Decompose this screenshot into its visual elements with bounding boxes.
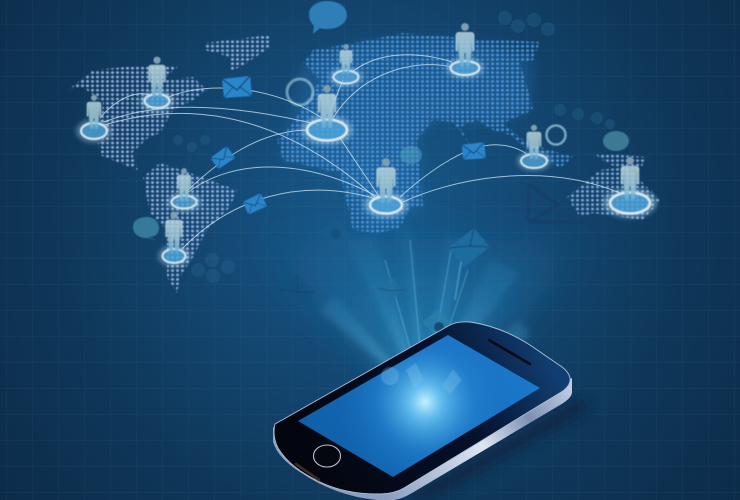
person: South East Asia <box>517 125 551 171</box>
phone shadow <box>400 398 590 500</box>
icon: envelope asia <box>462 142 486 160</box>
person: Europe <box>301 85 353 145</box>
network connection lines <box>100 55 620 248</box>
bottom slot <box>296 464 319 480</box>
icon: bubble top <box>309 1 347 34</box>
icon: envelope north atlantic <box>222 76 252 98</box>
faint circles left <box>173 135 235 283</box>
person: South America north <box>167 168 201 212</box>
person: Africa hub <box>364 158 408 218</box>
person: South America south <box>158 212 190 267</box>
person: North America <box>140 57 174 112</box>
map: Australia <box>567 167 660 220</box>
envelopes on the lines <box>209 76 486 215</box>
phone screen <box>298 335 540 477</box>
person: Alaska <box>76 95 112 143</box>
icon: magnifier rings <box>287 79 566 144</box>
speech bubbles <box>133 1 629 240</box>
screen glow <box>298 335 540 477</box>
phone metal edge <box>273 378 572 500</box>
light rays from the phone <box>250 225 600 400</box>
map glow: Eurasia <box>283 38 533 233</box>
faint background icons <box>173 11 615 340</box>
icons rising from screen <box>381 363 462 394</box>
map: Indonesia <box>593 153 647 170</box>
icon: bubble left <box>133 217 159 240</box>
icon: faint envelope centre <box>378 276 403 303</box>
home button <box>314 445 340 467</box>
smartphone <box>273 322 590 500</box>
dotted world map <box>68 33 660 293</box>
icon: large envelope <box>448 228 490 300</box>
map: South America <box>143 163 237 293</box>
faint circles right <box>498 11 615 129</box>
phone speaker <box>489 340 530 364</box>
map: Greenland <box>205 35 270 72</box>
icon: image tile <box>422 310 454 340</box>
icon: bubble centre <box>400 146 422 164</box>
people on rings <box>76 23 657 267</box>
icon: envelope atlantic <box>209 145 236 170</box>
icon: dark arrow envelope <box>528 184 585 222</box>
icon: bubble right <box>603 131 629 151</box>
person: Scandinavia <box>329 44 363 87</box>
map: North America <box>68 65 207 170</box>
map: Eurasia and Africa <box>277 33 573 233</box>
phone face <box>274 322 570 494</box>
icon: faint envelope left <box>280 274 315 308</box>
person: Russia <box>446 23 484 79</box>
icon: camera <box>318 218 352 250</box>
icon: envelope south atlantic <box>242 193 268 215</box>
person: Australia <box>603 157 657 218</box>
